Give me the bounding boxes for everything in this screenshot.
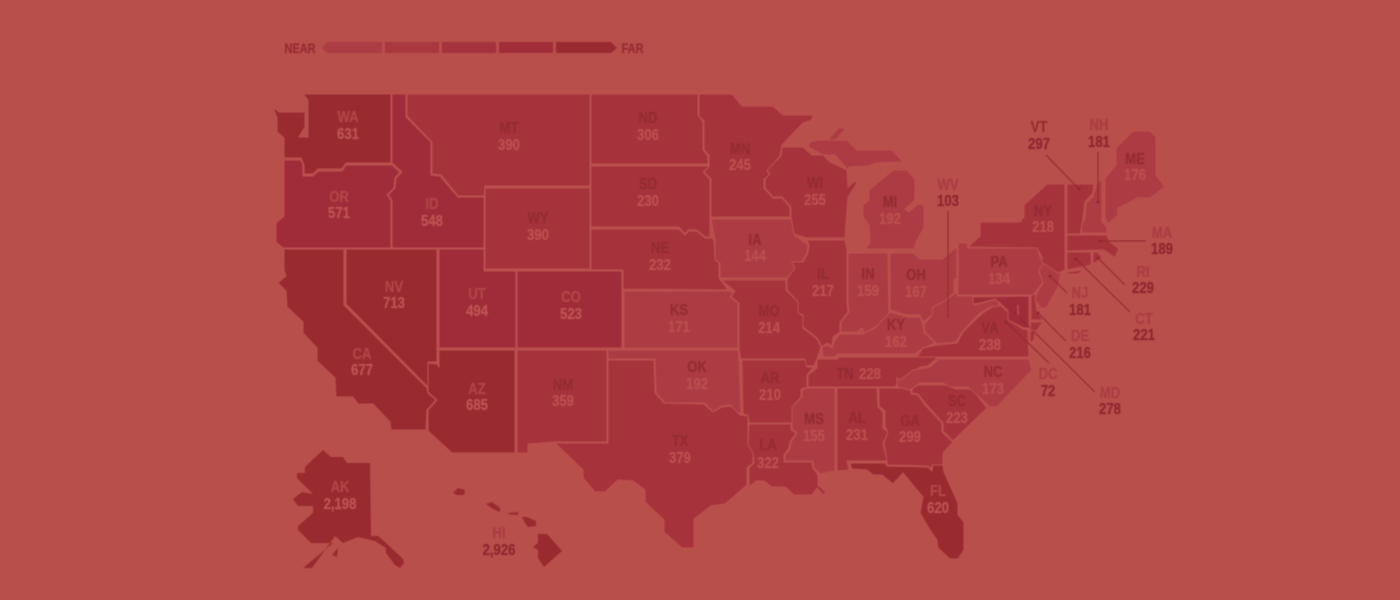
state: OK: OK (687, 359, 707, 376)
state: MA: 189 (1151, 241, 1173, 258)
state: MT: 390 (498, 137, 520, 154)
state: IA (711, 219, 808, 278)
state: PA: PA (990, 254, 1008, 271)
state: HI (453, 488, 562, 567)
state: ND (591, 94, 708, 164)
state: TN (808, 357, 938, 387)
map of United States (273, 94, 1173, 568)
state: KS: 171 (668, 319, 690, 336)
state: SC: SC (948, 393, 967, 410)
state: WA: WA (337, 109, 359, 126)
state: OR (276, 160, 400, 248)
state: DE (1030, 293, 1091, 362)
state: OK: 192 (686, 376, 708, 393)
state: NM: 359 (552, 393, 574, 410)
state: VA: VA (981, 320, 999, 337)
state: NC (897, 359, 1032, 407)
state: OR: 571 (328, 205, 350, 222)
state: CT: 221 (1133, 327, 1155, 344)
state: GA (879, 388, 953, 469)
state: OK (608, 350, 741, 413)
state: NM (517, 350, 607, 453)
state: AR (742, 360, 814, 423)
state: AL: 231 (846, 427, 868, 444)
state: RI (1093, 252, 1154, 297)
state: NJ: 181 (1069, 302, 1091, 319)
state: DE: 216 (1069, 345, 1091, 362)
state: MN: 245 (729, 157, 751, 174)
state: NH (1081, 117, 1110, 233)
state: MS (785, 388, 835, 474)
state: NY: NY (1034, 203, 1052, 220)
state: CT: CT (1135, 311, 1153, 328)
label: DC: DC (1039, 366, 1058, 383)
state: SD (591, 166, 710, 237)
state: UT (439, 249, 516, 348)
state: NH: 181 (1088, 134, 1110, 151)
state: WY: 390 (527, 227, 549, 244)
state: ME (1105, 131, 1165, 224)
state: IN (841, 253, 889, 333)
legend: near to far scale (284, 41, 644, 56)
state: WV: 103 (937, 193, 959, 210)
state: OH: OH (906, 267, 926, 284)
state: CA: 677 (351, 362, 373, 379)
state: SD: 230 (637, 193, 659, 210)
state: MN (699, 94, 813, 217)
state: OH: 167 (905, 284, 927, 301)
state: FL: FL (930, 483, 946, 500)
state: PA: 134 (988, 271, 1011, 288)
state: GA: 299 (899, 429, 921, 446)
state: VT (1028, 119, 1094, 234)
state: NC: NC (984, 364, 1003, 381)
state: MD: 278 (1099, 401, 1121, 418)
state: AZ (428, 350, 515, 453)
label: DC: 72 (1041, 383, 1055, 400)
state: ID: 548 (421, 213, 443, 230)
state: NE (591, 229, 728, 290)
state: ND: 306 (637, 127, 659, 144)
state: NC: 173 (982, 381, 1004, 398)
state: GA: GA (900, 413, 920, 430)
state: VA: 238 (979, 337, 1001, 354)
state: IN: 159 (857, 283, 879, 300)
state: FL (850, 463, 964, 559)
state: NJ: NJ (1072, 285, 1088, 302)
legend label: far: FAR (621, 41, 644, 56)
state: WA: 631 (337, 126, 359, 143)
state: ME: ME (1125, 151, 1145, 168)
state: IA: 144 (744, 248, 767, 265)
state: AR: AR (761, 370, 780, 387)
state: NY: 218 (1032, 219, 1054, 236)
state: TX: TX (672, 433, 689, 450)
label: DC (1004, 320, 1058, 400)
state: IL: 217 (812, 283, 834, 300)
state: CT (1067, 252, 1155, 344)
state: SD: SD (639, 176, 657, 193)
state: WI (765, 147, 856, 238)
state: MA: MA (1152, 225, 1173, 242)
state: OH (890, 247, 957, 322)
state: UT: 494 (466, 303, 489, 320)
state: ND: ND (639, 110, 657, 127)
state: KS (624, 291, 738, 348)
state: MO: 214 (758, 320, 781, 337)
legend bar: near to far segments (322, 42, 617, 53)
state: MT: MT (500, 120, 519, 137)
state: IL: IL (817, 266, 829, 283)
state: MN: MN (730, 141, 750, 158)
legend label: near: NEAR (284, 41, 316, 56)
state: OR: OR (329, 189, 349, 206)
state: CO: CO (561, 289, 581, 306)
state: AK: AK (331, 479, 350, 496)
state: VT: VT (1031, 119, 1047, 136)
state: AK (293, 450, 404, 568)
state: NV: 713 (383, 295, 405, 312)
state: MT (407, 94, 590, 196)
state: MI: 192 (879, 211, 901, 228)
state: MI (808, 128, 924, 249)
state: TX: 379 (669, 450, 691, 467)
state: LA: 322 (757, 455, 779, 472)
state: CA: CA (353, 346, 372, 363)
state: MD (973, 296, 1121, 418)
state: VA (917, 305, 1035, 357)
state: CO (517, 271, 622, 348)
state: AL: AL (848, 410, 866, 427)
state: ID (388, 94, 484, 248)
state: AR: 210 (759, 387, 781, 404)
state: MS: MS (804, 411, 824, 428)
state: TN: TN (836, 366, 854, 383)
state: MI: MI (883, 194, 897, 211)
state: IA: IA (748, 232, 762, 249)
state: SC (912, 385, 987, 441)
state: MA (1067, 225, 1173, 258)
state: AZ: 685 (466, 397, 488, 414)
state: UT: UT (468, 286, 486, 303)
state: WI: WI (807, 175, 823, 192)
state: MO (721, 280, 821, 366)
state: KY (822, 312, 935, 357)
state: TN: 228 (859, 366, 881, 383)
state: DE: DE (1071, 328, 1089, 345)
state: ME: 176 (1124, 167, 1146, 184)
state: NY (968, 184, 1084, 274)
state: NE: 232 (649, 257, 671, 274)
state: AZ: AZ (468, 381, 486, 398)
state: TX (555, 360, 753, 548)
state: AK: 2,198 (324, 496, 356, 513)
state: CA (278, 249, 436, 430)
state: WY (485, 188, 590, 269)
state: MD: MD (1100, 385, 1120, 402)
state: HI: 2,926 (483, 542, 515, 559)
state: RI: 229 (1132, 280, 1154, 297)
state: RI: RI (1136, 264, 1150, 281)
state: IL (787, 240, 848, 347)
state: IN: IN (861, 266, 875, 283)
state: NJ (1035, 263, 1091, 319)
state: PA (958, 243, 1045, 295)
state: NH: NH (1090, 117, 1108, 134)
state: NV (346, 249, 437, 387)
state: KS: KS (670, 302, 688, 319)
state: KY: 162 (885, 334, 907, 351)
state: NE: NE (651, 240, 669, 257)
state: WI: 255 (804, 192, 826, 209)
state: WV: WV (937, 177, 959, 194)
state: ID: ID (425, 196, 439, 213)
state: NV: NV (385, 279, 403, 296)
state: MO: MO (758, 303, 780, 320)
state: AL (837, 388, 888, 471)
state: WY: WY (527, 210, 549, 227)
state: NM: NM (553, 377, 573, 394)
state: LA: LA (759, 437, 777, 454)
state: CO: 523 (560, 306, 582, 323)
state: SC: 223 (946, 410, 968, 427)
state: LA (748, 424, 826, 495)
state: FL: 620 (927, 500, 949, 517)
state: WV (924, 177, 999, 344)
state: HI: HI (492, 525, 506, 542)
state: WA (273, 94, 391, 174)
state: KY: KY (887, 317, 905, 334)
state: MS: 155 (803, 428, 825, 445)
state: VT: 297 (1028, 136, 1050, 153)
